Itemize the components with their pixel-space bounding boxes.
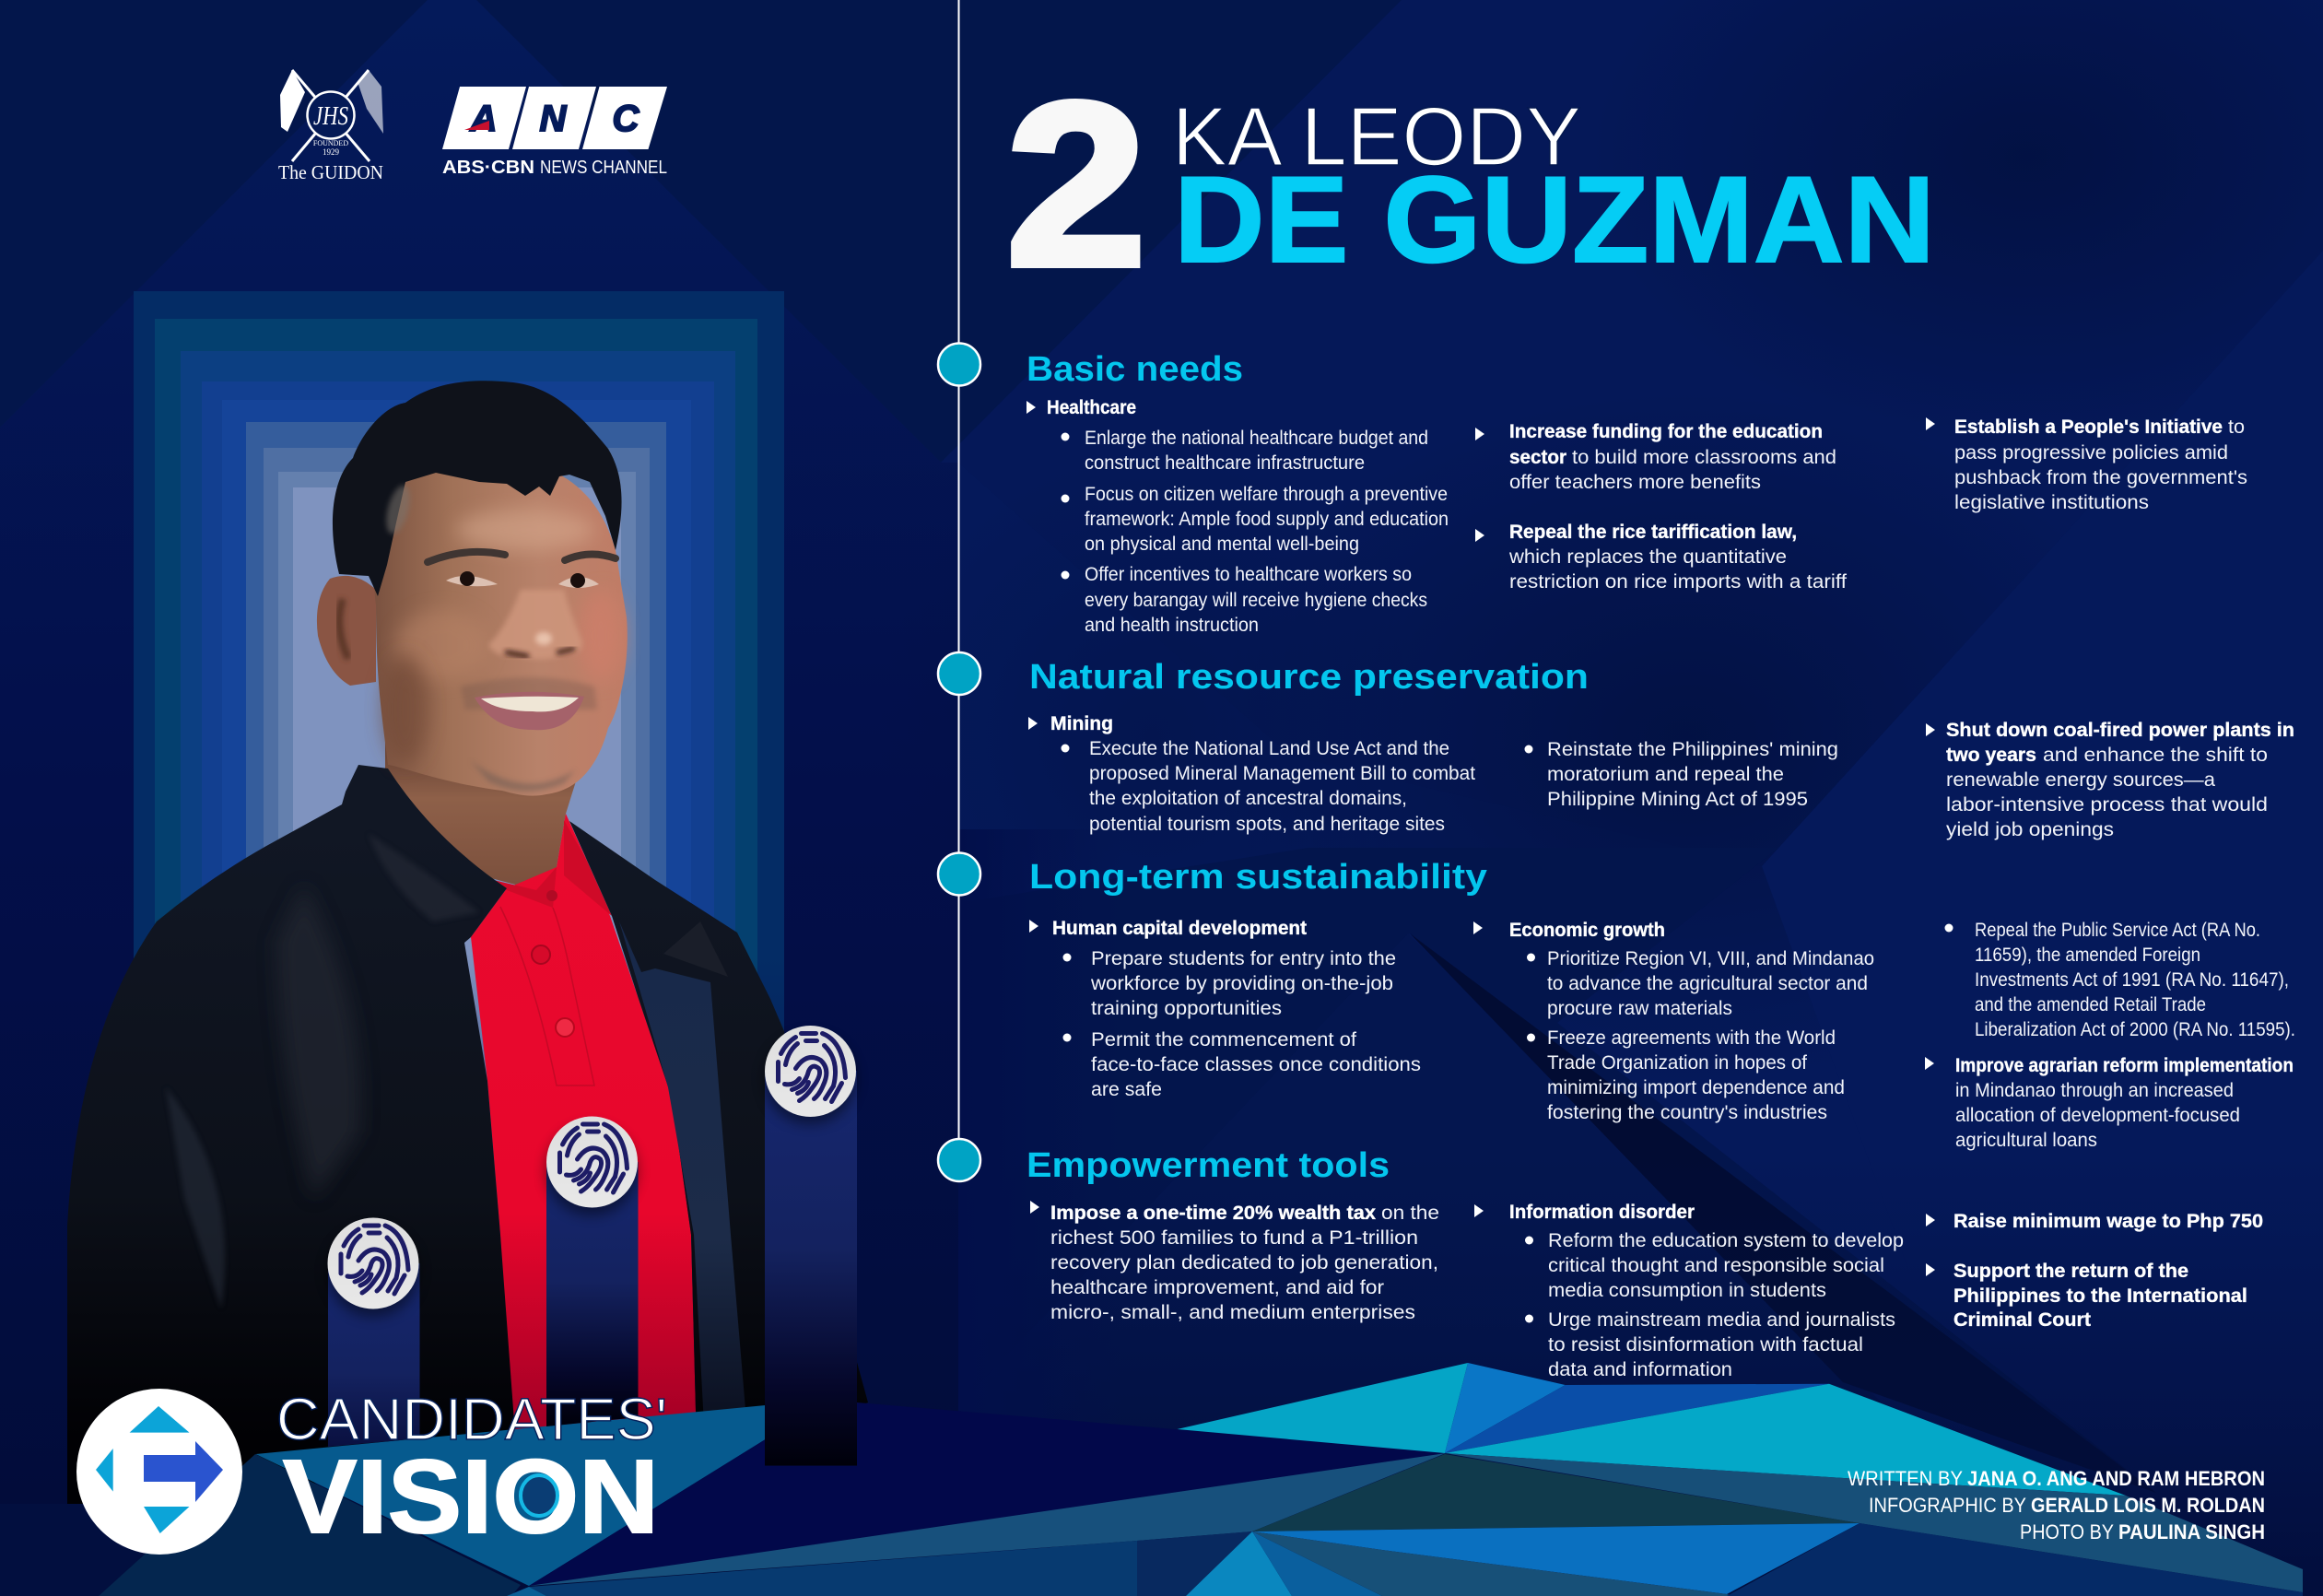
wealth tax item: on the bbox=[1381, 1203, 1439, 1224]
people's initiative item: Establish a People's Initiative bbox=[1954, 417, 2223, 438]
series badge bbox=[76, 1389, 242, 1555]
credits: WRITTEN BY bbox=[1848, 1467, 1963, 1490]
wage and ICC items: Criminal Court bbox=[1953, 1309, 2091, 1331]
education and rice items: restriction on rice imports with a tariff bbox=[1509, 571, 1847, 593]
red shirt bbox=[471, 814, 697, 1447]
logo: The Guidon: 1929 bbox=[323, 147, 339, 157]
information disorder list: critical thought and responsible social bbox=[1548, 1255, 1884, 1276]
people's initiative item: pushback from the government's bbox=[1954, 467, 2247, 488]
logo: ANC: N bbox=[540, 99, 568, 139]
logo: The Guidon bbox=[278, 70, 383, 183]
candidate portrait bbox=[67, 381, 868, 1504]
human capital list: training opportunities bbox=[1091, 998, 1282, 1019]
coal plants item: and enhance the shift to bbox=[2043, 745, 2268, 766]
economic growth list bbox=[1473, 920, 2295, 1123]
section: empowerment tools bbox=[1027, 1146, 2263, 1380]
healthcare list: Offer incentives to healthcare workers so bbox=[1085, 564, 1412, 585]
jacket left side bbox=[67, 765, 516, 1504]
title: candidate name bbox=[1172, 91, 1935, 288]
education and rice items bbox=[1475, 421, 1847, 593]
people's initiative item bbox=[1926, 417, 2247, 513]
healthcare list: construct healthcare infrastructure bbox=[1085, 452, 1365, 474]
credits: PAULINA SINGH bbox=[2118, 1520, 2265, 1543]
human capital list: workforce by providing on-the-job bbox=[1090, 973, 1393, 994]
human capital list: Human capital development bbox=[1052, 918, 1307, 939]
portrait backdrop: nested rectangles bbox=[134, 291, 784, 1397]
section: basic needs bbox=[1027, 350, 2247, 636]
economic growth list: minimizing import dependence and bbox=[1547, 1077, 1845, 1098]
section: natural resource preservation bbox=[1028, 658, 2294, 840]
healthcare list: framework: Ample food supply and education bbox=[1085, 509, 1449, 530]
nose bbox=[488, 590, 582, 660]
pillar 3 bbox=[764, 1026, 857, 1465]
economic growth list: procure raw materials bbox=[1547, 998, 1732, 1019]
mining list: Execute the National Land Use Act and the bbox=[1089, 738, 1449, 759]
information disorder list: media consumption in students bbox=[1548, 1280, 1826, 1301]
mining list: Mining bbox=[1050, 713, 1113, 734]
information disorder list: Urge mainstream media and journalists bbox=[1548, 1309, 1895, 1331]
mining list: moratorium and repeal the bbox=[1547, 764, 1784, 785]
human capital list: are safe bbox=[1091, 1079, 1162, 1100]
low-poly bottom artwork bbox=[0, 1363, 2303, 1596]
agrarian reform item: in Mindanao through an increased bbox=[1955, 1080, 2234, 1101]
information disorder list: Reform the education system to develop bbox=[1548, 1230, 1904, 1251]
credits: PHOTO BY bbox=[2020, 1520, 2114, 1543]
wealth tax item: Impose a one-time 20% wealth tax bbox=[1050, 1203, 1376, 1224]
education and rice items: Increase funding for the education bbox=[1509, 421, 1823, 442]
education and rice items: offer teachers more benefits bbox=[1509, 472, 1761, 493]
economic growth list: Economic growth bbox=[1509, 920, 1665, 941]
heading: Basic needs bbox=[1027, 350, 1243, 389]
eyebrows bbox=[428, 552, 616, 562]
human capital list: face-to-face classes once conditions bbox=[1091, 1054, 1421, 1075]
education and rice items: to build more classrooms and bbox=[1572, 447, 1836, 468]
economic growth list: Investments Act of 1991 (RA No. 11647), bbox=[1975, 969, 2289, 991]
economic growth list: Repeal the Public Service Act (RA No. bbox=[1975, 920, 2260, 941]
stubble bbox=[461, 677, 597, 710]
human capital list bbox=[1029, 918, 1421, 1100]
healthcare list: Healthcare bbox=[1047, 397, 1136, 418]
economic growth list: 11659), the amended Foreign bbox=[1975, 945, 2200, 966]
economic growth list: Trade Organization in hopes of bbox=[1547, 1052, 1807, 1074]
eyes bbox=[446, 576, 599, 588]
face highlights and shadows bbox=[456, 510, 594, 550]
wealth tax item: richest 500 families to fund a P1-trillion bbox=[1050, 1227, 1418, 1249]
section: long-term sustainability bbox=[1029, 858, 2295, 1151]
agrarian reform item bbox=[1925, 1055, 2294, 1151]
healthcare list: Focus on citizen welfare through a preventive bbox=[1085, 484, 1448, 505]
credits: JANA O. ANG AND RAM HEBRON bbox=[1967, 1467, 2265, 1490]
pillar 1 bbox=[327, 1218, 420, 1447]
coal plants item: renewable energy sources—a bbox=[1946, 769, 2215, 791]
human capital list: Permit the commencement of bbox=[1091, 1029, 1356, 1050]
coal plants item bbox=[1926, 720, 2294, 840]
jacket right side bbox=[569, 821, 868, 1447]
agrarian reform item: Improve agrarian reform implementation bbox=[1955, 1055, 2294, 1076]
healthcare list: every barangay will receive hygiene checks bbox=[1085, 590, 1427, 611]
heading: Long-term sustainability bbox=[1029, 858, 1487, 897]
coal plants item: Shut down coal-fired power plants in bbox=[1946, 720, 2294, 741]
information disorder list: to resist disinformation with factual bbox=[1548, 1334, 1863, 1355]
neck bbox=[385, 737, 590, 890]
title: number: 2 bbox=[1006, 55, 1146, 314]
mining list: the exploitation of ancestral domains, bbox=[1089, 788, 1407, 809]
credits: INFOGRAPHIC BY bbox=[1869, 1494, 2026, 1517]
wealth tax item: micro-, small-, and medium enterprises bbox=[1050, 1302, 1415, 1323]
wage and ICC items: Support the return of the bbox=[1953, 1261, 2188, 1282]
human capital list: Prepare students for entry into the bbox=[1091, 948, 1396, 969]
credits bbox=[1848, 1467, 2265, 1543]
economic growth list: fostering the country's industries bbox=[1547, 1102, 1827, 1123]
mining list: Reinstate the Philippines' mining bbox=[1547, 739, 1838, 760]
mouth bbox=[475, 692, 584, 730]
healthcare list: and health instruction bbox=[1085, 615, 1259, 636]
mining list bbox=[1028, 713, 1838, 835]
heading: Empowerment tools bbox=[1027, 1146, 1390, 1185]
logo: The Guidon: FOUNDED bbox=[313, 139, 348, 147]
wage and ICC items: Raise minimum wage to Php 750 bbox=[1953, 1211, 2263, 1232]
wage and ICC items: Philippines to the International bbox=[1953, 1285, 2247, 1307]
logo: The Guidon: The GUIDON bbox=[278, 161, 383, 183]
agrarian reform item: allocation of development-focused bbox=[1955, 1105, 2240, 1126]
economic growth list: Freeze agreements with the World bbox=[1547, 1027, 1836, 1049]
logo: The Guidon: JHS bbox=[313, 102, 348, 131]
wealth tax item: recovery plan dedicated to job generation, bbox=[1050, 1252, 1438, 1273]
fingerprint pillars bbox=[327, 1026, 857, 1465]
economic growth list: and the amended Retail Trade bbox=[1975, 994, 2206, 1015]
jacket lining bbox=[619, 921, 748, 1442]
pillar 2 bbox=[546, 1117, 638, 1426]
education and rice items: Repeal the rice tariffication law, bbox=[1509, 522, 1797, 543]
ear bbox=[317, 576, 376, 686]
healthcare list bbox=[1027, 397, 1449, 636]
chin stubble bbox=[470, 760, 576, 792]
credits: GERALD LOIS M. ROLDAN bbox=[2031, 1494, 2265, 1517]
coal plants item: yield job openings bbox=[1946, 819, 2114, 840]
education and rice items: which replaces the quantitative bbox=[1508, 546, 1787, 568]
logo: ANC: A bbox=[470, 99, 497, 139]
series title bbox=[276, 1386, 667, 1555]
healthcare list: Enlarge the national healthcare budget and bbox=[1085, 428, 1428, 449]
series title: VISION bbox=[283, 1438, 659, 1555]
face bbox=[374, 458, 628, 796]
wealth tax item: healthcare improvement, and aid for bbox=[1050, 1277, 1384, 1298]
economic growth list: Prioritize Region VI, VIII, and Mindanao bbox=[1547, 948, 1874, 969]
logo: ANC: ABS·CBN bbox=[442, 158, 534, 178]
jacket sheen bbox=[276, 885, 360, 1198]
coal plants item: two years bbox=[1946, 745, 2036, 766]
shirt placket and buttons bbox=[500, 907, 594, 1086]
mining list: Philippine Mining Act of 1995 bbox=[1547, 789, 1808, 810]
education and rice items: sector bbox=[1509, 447, 1566, 468]
wealth tax item bbox=[1030, 1201, 1439, 1323]
logo: ANC: C bbox=[613, 99, 640, 139]
coal plants item: labor-intensive process that would bbox=[1946, 794, 2268, 816]
agrarian reform item: agricultural loans bbox=[1955, 1130, 2097, 1151]
healthcare list: on physical and mental well-being bbox=[1085, 534, 1359, 555]
hair bbox=[333, 381, 622, 596]
information disorder list bbox=[1474, 1202, 1904, 1380]
information disorder list: Information disorder bbox=[1509, 1202, 1695, 1223]
people's initiative item: pass progressive policies amid bbox=[1954, 442, 2228, 464]
mining list: proposed Mineral Management Bill to combat bbox=[1089, 763, 1475, 784]
wage and ICC items bbox=[1926, 1211, 2263, 1331]
heading: Natural resource preservation bbox=[1029, 658, 1589, 697]
title: candidate name: KA LEODY bbox=[1172, 91, 1581, 183]
logo: ANC bbox=[442, 87, 667, 178]
economic growth list: to advance the agricultural sector and bbox=[1547, 973, 1868, 994]
economic growth list: Liberalization Act of 2000 (RA No. 11595). bbox=[1975, 1019, 2295, 1040]
mining list: potential tourism spots, and heritage sites bbox=[1089, 814, 1445, 835]
people's initiative item: legislative institutions bbox=[1954, 492, 2149, 513]
information disorder list: data and information bbox=[1548, 1359, 1732, 1380]
logo: ANC: NEWS CHANNEL bbox=[540, 158, 667, 178]
people's initiative item: to bbox=[2228, 417, 2245, 438]
series title: CANDIDATES' bbox=[276, 1386, 667, 1452]
title: candidate name: DE GUZMAN bbox=[1174, 152, 1935, 288]
timeline rule and nodes bbox=[938, 0, 980, 1181]
